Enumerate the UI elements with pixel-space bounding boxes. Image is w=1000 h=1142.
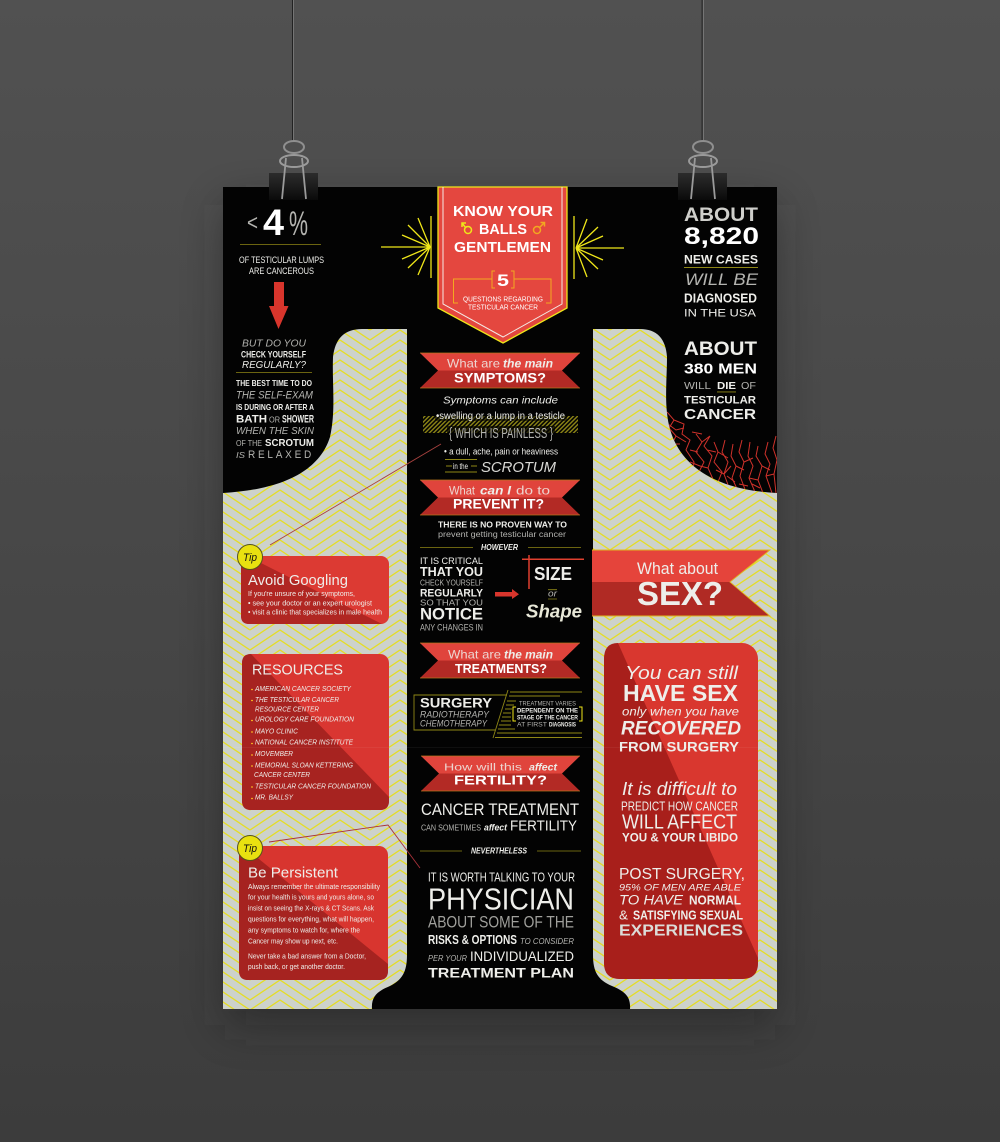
text: post surgery: [619, 866, 745, 940]
stat: deaths: TESTICULAR: [684, 394, 756, 406]
text: check regularly stack: ANY CHANGES IN: [420, 622, 483, 634]
title banner: KNOW YOUR: [453, 203, 553, 220]
stat: new cases: WILL BE: [685, 270, 759, 289]
text: self-exam advice: THE SELF-EXAM: [236, 390, 314, 402]
stat: new cases: 8,820: [684, 223, 759, 250]
text: self-exam advice: REGULARLY?: [242, 359, 306, 371]
text: self-exam advice: SHOWER: [282, 414, 314, 426]
text: check regularly stack: NOTICE: [420, 604, 483, 624]
text: difficult to predict: PREDICT HOW CANCER: [621, 798, 738, 813]
tip card: be persistent: any symptoms to watch for, where the: [248, 927, 360, 934]
treatments box: STAGE OF THE CANCER: [517, 714, 578, 722]
title banner: BALLS: [479, 221, 527, 238]
ribbon: what about sex: SEX?: [637, 575, 723, 612]
resources card: MEMORIAL SLOAN KETTERING: [255, 761, 353, 770]
resources card: RESOURCE CENTER: [255, 705, 319, 714]
text: you can still have sex: [619, 663, 741, 754]
ribbon: prevent it: can I: [480, 486, 512, 498]
stat: deaths: CANCER: [684, 406, 756, 423]
text: difficult to predict: YOU & YOUR LIBIDO: [622, 831, 738, 845]
resources card: MR. BALLSY: [255, 793, 294, 802]
binder clip left: [269, 141, 318, 200]
treatments box: [414, 690, 582, 738]
text: difficult to predict: [621, 779, 738, 845]
stat: less than 4 percent: OF TESTICULAR LUMPS: [239, 255, 324, 266]
text: post surgery: &: [619, 907, 628, 922]
text: check regularly stack: IT IS CRITICAL: [420, 556, 483, 566]
red veins illustration: [667, 412, 777, 493]
tip card: avoid googling: If you're unsure of your symptoms,: [248, 589, 355, 598]
text: post surgery: POST SURGERY,: [619, 866, 745, 883]
text: fertility and physician: CANCER TREATMENT: [421, 801, 579, 819]
treatments box: AT FIRST: [517, 722, 547, 729]
title banner: 5: [497, 271, 509, 290]
treatments box: RADIOTHERAPY: [420, 710, 490, 720]
hanging wires: [292, 0, 704, 142]
stat: deaths: 380 MEN: [684, 360, 757, 377]
title banner: [438, 187, 567, 343]
icon: tip badge: [238, 836, 262, 860]
ribbon: main treatments: What are: [448, 648, 501, 662]
text: symptoms list: Symptoms can include: [443, 396, 558, 406]
arrow: red right: [495, 589, 519, 599]
stat: less than 4 percent: %: [289, 205, 308, 243]
stat: deaths: [684, 339, 757, 423]
text: you can still have sex: HAVE SEX: [623, 680, 739, 706]
text: fertility and physician: TREATMENT PLAN: [428, 965, 574, 981]
text: difficult to predict: WILL AFFECT: [622, 811, 737, 833]
resources card: UROLOGY CARE FOUNDATION: [255, 715, 355, 724]
tip card: be persistent: [238, 836, 388, 980]
text: prevention: THERE IS NO PROVEN WAY TO: [438, 520, 567, 530]
text: symptoms list: •swelling or a lump in a testicle: [436, 411, 565, 422]
text: self-exam advice: SCROTUM: [265, 437, 314, 449]
text: symptoms list: in the: [453, 462, 468, 471]
thin red connector bottom: [269, 825, 420, 868]
stat: deaths: DIE: [717, 380, 736, 392]
text: check regularly stack: REGULARLY: [420, 588, 484, 600]
text: self-exam advice: [236, 338, 314, 461]
text: self-exam advice: BATH: [236, 414, 267, 426]
resources card: CANCER CENTER: [254, 770, 311, 779]
ribbon: fertility: FERTILITY?: [454, 772, 547, 788]
stat: less than 4 percent: <: [247, 210, 258, 235]
resources card: [242, 654, 389, 810]
text: fertility and physician: TO CONSIDER: [520, 936, 574, 946]
stat: deaths: WILL: [684, 380, 711, 392]
text: self-exam advice: RELAXED: [248, 449, 314, 461]
text: fertility and physician: ABOUT SOME OF THE: [428, 912, 574, 931]
tip card: be persistent: Never take a bad answer from a Doctor,: [248, 953, 366, 960]
resources card: NATIONAL CANCER INSTITUTE: [255, 738, 354, 747]
binder clip right: [678, 141, 727, 200]
black poster shape: [223, 187, 777, 1009]
ribbon: prevent it: What: [449, 486, 476, 498]
stat: new cases: ABOUT: [684, 205, 758, 226]
resources card: AMERICAN CANCER SOCIETY: [254, 684, 352, 693]
ribbon: main symptoms: What are: [447, 356, 500, 370]
ribbon: main treatments: [420, 643, 580, 678]
ribbon: main treatments: TREATMENTS?: [455, 661, 547, 676]
text: fertility and physician: FERTILITY: [510, 817, 577, 834]
title banner: QUESTIONS REGARDING: [463, 294, 543, 304]
treatments box: SURGERY: [420, 695, 493, 711]
ribbon: prevent it: [420, 480, 580, 515]
ribbon: fertility: How will this: [444, 762, 522, 774]
sunburst right: [574, 216, 624, 279]
text: size or shape: or: [548, 589, 558, 599]
icon: male symbol left: [462, 223, 472, 234]
text: self-exam advice: OR: [269, 416, 280, 424]
text: self-exam advice: IS: [236, 451, 246, 460]
text: post surgery: SATISFYING SEXUAL: [633, 907, 743, 922]
icon: tip badge: [238, 544, 262, 570]
resources card: MAYO CLINIC: [255, 726, 299, 735]
text: symptoms list: SCROTUM: [481, 459, 556, 476]
icon: male symbol right: [534, 222, 544, 234]
poster shadow: [225, 205, 775, 1025]
ribbon: main symptoms: the main: [503, 356, 553, 370]
text: post surgery: 95% OF MEN ARE ABLE: [619, 883, 742, 894]
text: fertility and physician: [420, 801, 581, 981]
tip card: avoid googling: • see your doctor or an expert urologist: [248, 598, 373, 607]
title banner: TESTICULAR CANCER: [468, 302, 538, 312]
stat: new cases: DIAGNOSED: [684, 290, 757, 305]
stat: less than 4 percent: 4: [263, 202, 284, 243]
text: post surgery: EXPERIENCES: [619, 923, 743, 940]
text: fertility and physician: RISKS & OPTIONS: [428, 932, 517, 947]
text: prevention: prevent getting testicular cancer: [438, 529, 566, 539]
ribbon: prevent it: do to: [516, 486, 550, 498]
ribbon: main symptoms: [420, 353, 580, 388]
text: check regularly stack: SO THAT YOU: [420, 598, 483, 608]
text: size or shape: Shape: [526, 602, 582, 622]
text: fertility and physician: PER YOUR: [428, 953, 467, 963]
text: self-exam advice: CHECK YOURSELF: [241, 350, 306, 360]
ribbon: prevent it: PREVENT IT?: [453, 496, 544, 512]
text: prevention: [420, 520, 581, 552]
stat: new cases: IN THE USA: [684, 308, 757, 320]
treatments box: TREATMENT VARIES: [519, 701, 577, 708]
text: fertility and physician: INDIVIDUALIZED: [470, 948, 574, 964]
resources card: RESOURCES: [252, 661, 343, 678]
tip card: be persistent: push back, or get another doctor.: [248, 964, 345, 971]
sunburst left: [381, 216, 431, 278]
treatments box: DEPENDENT ON THE: [517, 708, 579, 715]
text: check regularly stack: [420, 556, 484, 634]
sex information card: [604, 643, 758, 979]
text: fertility and physician: PHYSICIAN: [428, 881, 574, 916]
text: prevention: HOWEVER: [481, 543, 518, 552]
text: symptoms list: [423, 396, 578, 476]
text: symptoms list: • a dull, ache, pain or heaviness: [444, 446, 558, 456]
tip card: avoid googling: • visit a clinic that specializes in male health: [248, 607, 382, 616]
text: difficult to predict: It is difficult to: [622, 779, 737, 799]
treatments box: DIAGNOSIS: [549, 722, 576, 729]
resources card: MOVEMBER: [255, 749, 293, 758]
text: fertility and physician: NEVERTHELESS: [471, 847, 528, 856]
ribbon: fertility: [421, 756, 580, 791]
thin red connector top: [270, 444, 441, 545]
text: check regularly stack: THAT YOU: [420, 564, 483, 579]
text: self-exam advice: WHEN THE SKIN: [236, 425, 314, 437]
tip card: be persistent: questions for everything, what will happen,: [248, 917, 374, 924]
resources card: THE TESTICULAR CANCER: [255, 695, 339, 704]
text: self-exam advice: BUT DO YOU: [242, 338, 306, 350]
title banner: GENTLEMEN: [454, 239, 551, 256]
poster background with chevron pattern: [223, 187, 777, 1009]
text: self-exam advice: THE BEST TIME TO DO: [236, 378, 312, 388]
text: post surgery: TO HAVE: [619, 891, 684, 907]
text: size or shape: SIZE: [534, 564, 572, 584]
stat: new cases: NEW CASES: [684, 254, 758, 266]
text: fertility and physician: CAN SOMETIMES: [421, 823, 481, 832]
tip card: be persistent: Cancer may show up next, etc.: [248, 938, 338, 945]
text: check regularly stack: CHECK YOURSELF: [420, 578, 483, 588]
stat: less than 4 percent: [239, 202, 324, 277]
stat: new cases: [684, 205, 759, 320]
icon: tip badge: Tip: [243, 843, 257, 855]
text: self-exam advice: IS DURING OR AFTER A: [236, 402, 314, 412]
text: you can still have sex: You can still: [625, 663, 739, 683]
tip card: avoid googling: Avoid Googling: [248, 572, 348, 589]
text: you can still have sex: RECOVERED: [621, 718, 741, 739]
tip card: be persistent: insist on seeing the X-rays & CT Scans. Ask: [248, 906, 374, 913]
stat: less than 4 percent: ARE CANCEROUS: [249, 266, 314, 277]
text: fertility and physician: affect: [484, 822, 508, 833]
ribbon: what about sex: What about: [637, 560, 718, 578]
ribbon: main treatments: the main: [504, 648, 553, 662]
text: post surgery: NORMAL: [689, 892, 741, 907]
text: you can still have sex: FROM SURGERY: [619, 738, 740, 754]
text: size or shape: [522, 555, 584, 622]
text: you can still have sex: only when you have: [622, 705, 739, 719]
ribbon: fertility: affect: [529, 762, 557, 774]
poster fold shading: [223, 747, 777, 748]
tip card: be persistent: Always remember the ultimate responsibility: [248, 884, 380, 891]
treatments box: CHEMOTHERAPY: [420, 719, 488, 729]
stat: deaths: OF: [741, 380, 756, 392]
text: self-exam advice: OF THE: [236, 439, 262, 448]
resources card: TESTICULAR CANCER FOUNDATION: [255, 781, 372, 790]
text: fertility and physician: IT IS WORTH TALKING TO YOUR: [428, 870, 575, 885]
text: symptoms list: { WHICH IS PAINLESS }: [449, 425, 553, 442]
tip card: be persistent: Be Persistent: [248, 864, 339, 881]
stat: deaths: ABOUT: [684, 339, 757, 360]
tip card: be persistent: for your health is yours and yours alone, so: [248, 895, 374, 902]
tip card: avoid googling: [238, 544, 389, 624]
arrow: red down: [269, 282, 288, 329]
icon: tip badge: Tip: [243, 552, 257, 564]
ribbon: what about sex: [592, 550, 770, 616]
ribbon: main symptoms: SYMPTOMS?: [454, 370, 546, 386]
